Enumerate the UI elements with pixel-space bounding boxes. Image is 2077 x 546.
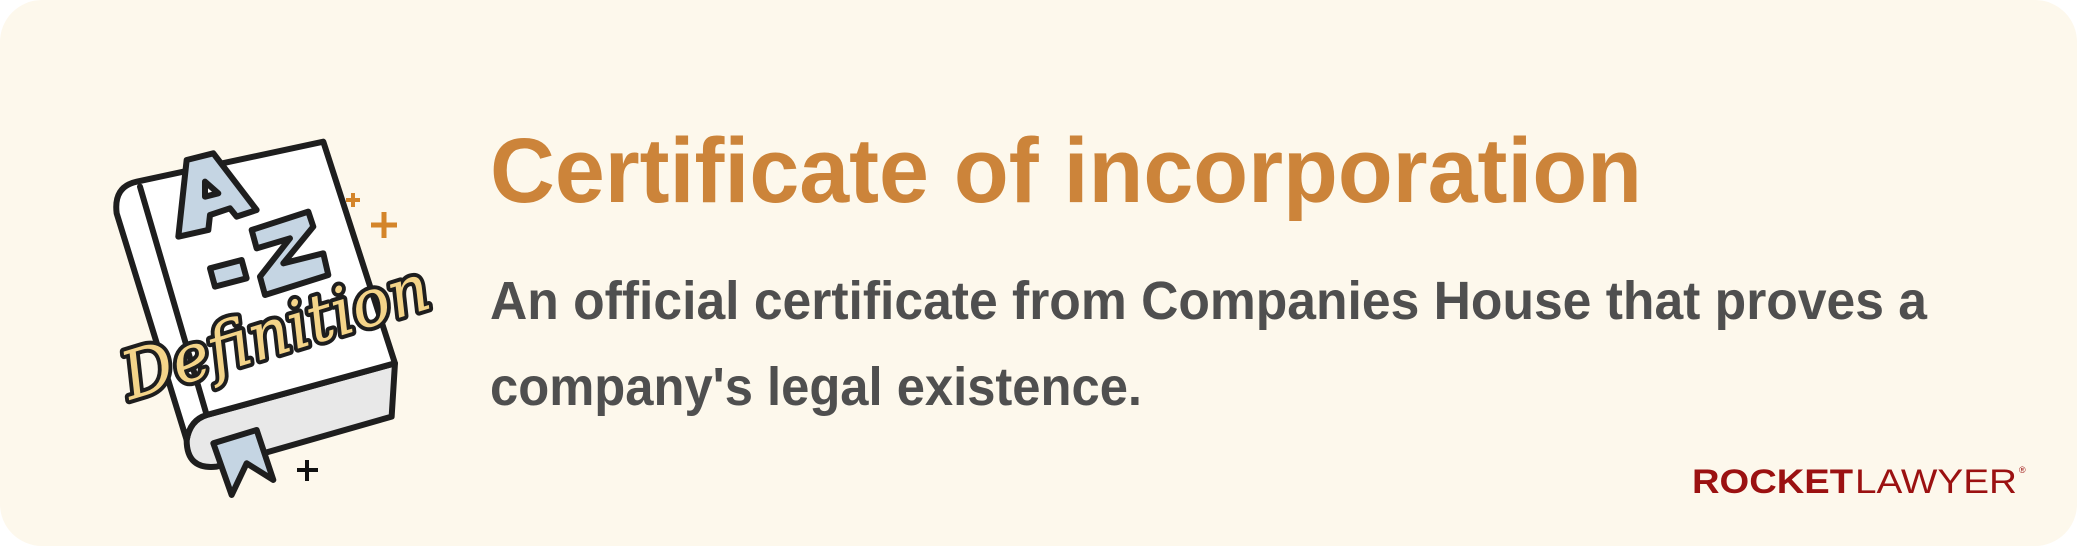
icon: definition book xyxy=(111,142,439,495)
description text: An official certificate from Companies House that proves a xyxy=(490,271,1928,331)
bookmark xyxy=(213,430,273,495)
description text xyxy=(490,271,1928,417)
cover xyxy=(116,142,395,440)
logo: Rocket Lawyer: LAWYER xyxy=(1855,463,2017,501)
title: Certificate of incorporation xyxy=(490,120,1642,222)
logo: Rocket Lawyer xyxy=(1692,463,2026,501)
logo: Rocket Lawyer: ROCKET xyxy=(1692,463,1853,501)
logo: Rocket Lawyer: ® xyxy=(2019,465,2026,475)
letter A xyxy=(178,153,257,237)
letter Z xyxy=(252,212,328,295)
dash xyxy=(210,260,247,287)
page block xyxy=(187,363,395,467)
word: Definition: Definition xyxy=(111,249,439,416)
sparkles xyxy=(346,193,397,238)
description text: company's legal existence. xyxy=(490,357,1142,417)
